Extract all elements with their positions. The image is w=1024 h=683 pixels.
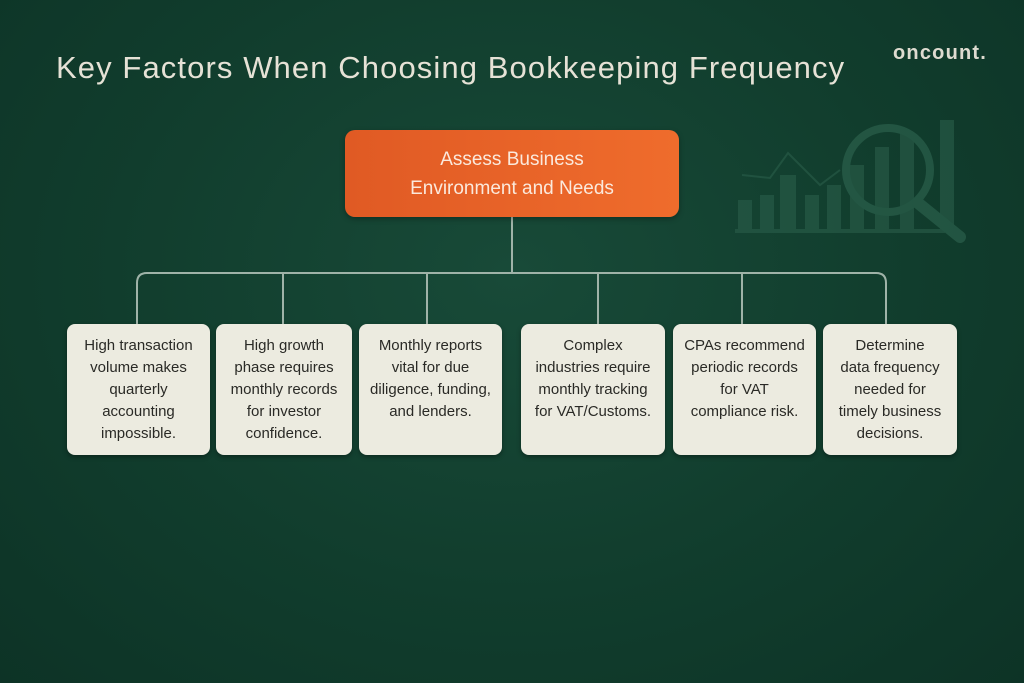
- box 1: [67, 324, 210, 455]
- box 3: Monthly reports: [379, 337, 482, 354]
- box 2: for investor: [247, 403, 321, 420]
- box 2: [216, 324, 352, 455]
- box 2: confidence.: [246, 425, 322, 442]
- box 3: and lenders.: [389, 403, 472, 420]
- box 5: [673, 324, 816, 455]
- box 6: data frequency: [840, 359, 940, 376]
- logo: oncount.: [893, 42, 987, 64]
- top box: [345, 130, 679, 217]
- box 6: timely business: [839, 403, 941, 420]
- box 1: High transaction: [84, 337, 193, 354]
- box 4: monthly tracking: [538, 381, 648, 398]
- box 5: for VAT: [720, 381, 769, 398]
- top box: Assess Business: [440, 148, 584, 170]
- box 6: needed for: [854, 381, 926, 398]
- box 6: decisions.: [857, 425, 923, 442]
- title: Key Factors When Choosing Bookkeeping Frequency: [56, 50, 845, 85]
- box 6: Determine: [855, 337, 925, 354]
- box 3: diligence, funding,: [370, 381, 491, 398]
- box 2: monthly records: [231, 381, 337, 398]
- box 6: [823, 324, 957, 455]
- box 4: for VAT/Customs.: [535, 403, 651, 420]
- box 1: quarterly: [109, 381, 168, 398]
- top box: Environment and Needs: [410, 178, 614, 198]
- box 1: volume makes: [90, 359, 187, 376]
- box 1: accounting: [102, 403, 175, 420]
- box 2: phase requires: [234, 359, 334, 376]
- box 5: CPAs recommend: [684, 337, 805, 354]
- background chart icon: [735, 120, 966, 243]
- box 5: periodic records: [691, 359, 798, 376]
- box 2: High growth: [244, 337, 324, 354]
- box 4: Complex: [563, 337, 623, 354]
- box 4: [521, 324, 665, 455]
- box 3: [359, 324, 502, 455]
- box 3: vital for due: [392, 359, 469, 376]
- box 5: compliance risk.: [691, 403, 798, 420]
- box 1: impossible.: [101, 425, 176, 442]
- box 4: industries require: [535, 359, 651, 376]
